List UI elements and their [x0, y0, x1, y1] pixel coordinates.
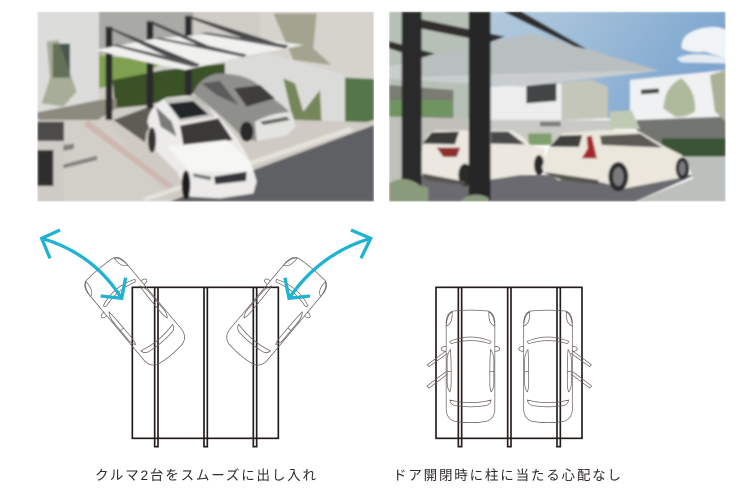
arrow: right two-way turning arrow [285, 230, 371, 298]
diagram: doors opening clear of the posts [427, 287, 592, 447]
icon: right car with open doors [519, 310, 592, 423]
photo: carport seen from street level [389, 12, 726, 202]
posts and roof [106, 27, 112, 120]
plan: carport frame and posts [436, 287, 582, 447]
white car [147, 96, 257, 198]
roof [389, 64, 656, 88]
right parked car [542, 130, 689, 188]
icon: left car with open doors [427, 310, 500, 423]
icon: right car at an angle [218, 250, 335, 374]
diagram: cars swinging in and out of the carport [42, 230, 371, 447]
grey car [193, 73, 296, 141]
plan: carport frame and posts [132, 287, 278, 447]
left parked car [422, 130, 545, 183]
arrow: left two-way turning arrow [42, 230, 126, 298]
beams and posts [503, 12, 587, 49]
icon: left car at an angle [77, 250, 194, 374]
photo: carport seen from above [37, 12, 374, 202]
caption: left diagram: クルマ2台をスムーズに出し入れ [95, 468, 316, 483]
caption: right diagram: ドア開閉時に柱に当たる心配なし [393, 468, 621, 483]
